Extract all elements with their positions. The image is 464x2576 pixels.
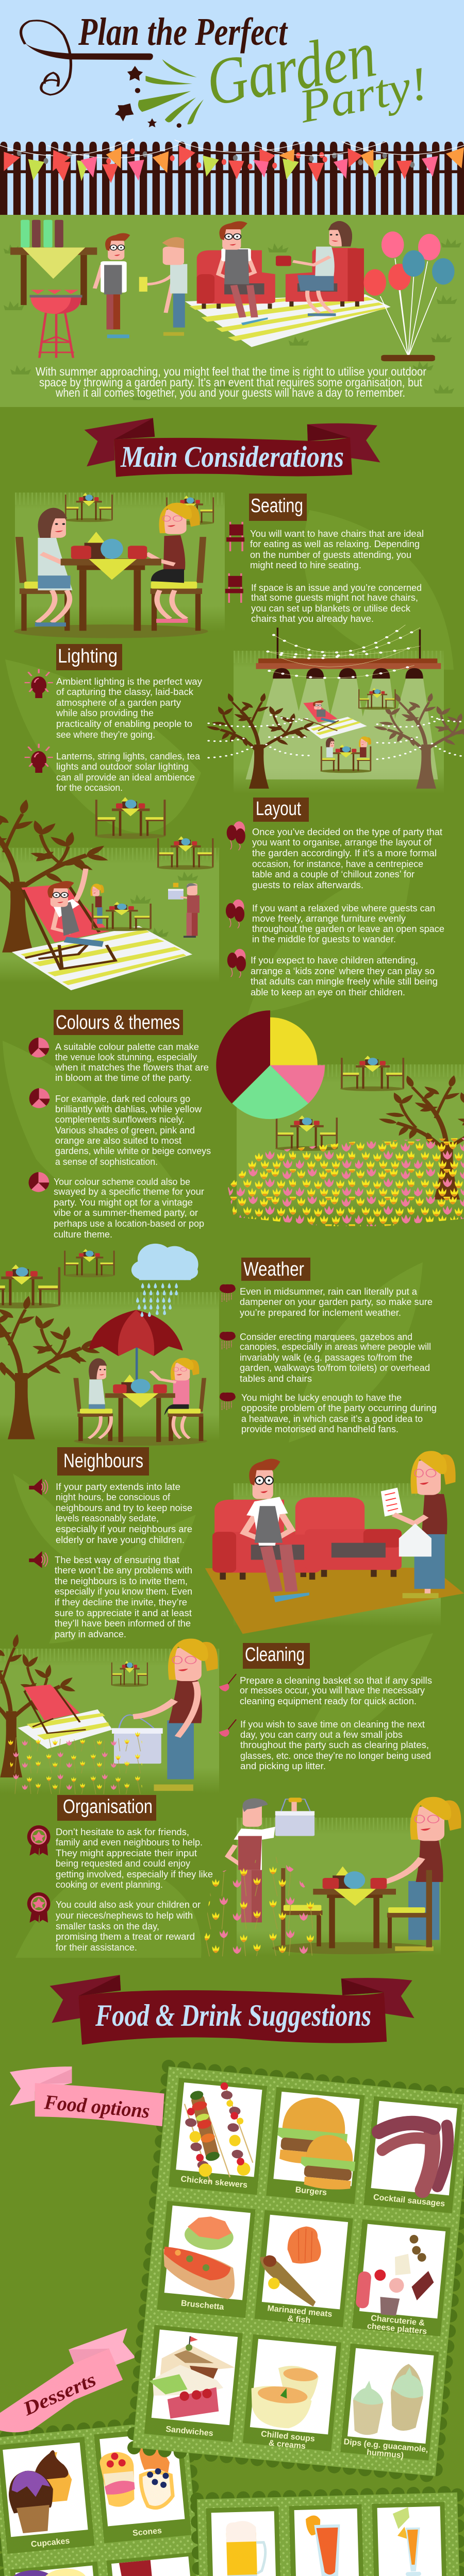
cleaning text: or messes occur, you will have the necessary xyxy=(240,1685,425,1696)
food labels xyxy=(156,2175,452,2463)
section: neighbours xyxy=(29,1447,464,1639)
layout text: able to keep an eye on their children. xyxy=(251,987,405,997)
lighting text: for the occasion. xyxy=(56,783,123,793)
organisation text: promising them a treat or reward xyxy=(56,1931,195,1942)
seating illustration xyxy=(14,493,225,638)
colours text: For example, dark red colours go xyxy=(55,1094,190,1104)
neighbours illustration xyxy=(205,1451,464,1634)
food labels: & fish xyxy=(287,2314,311,2325)
lemonade xyxy=(393,2507,421,2576)
cleaning heading: Cleaning xyxy=(245,1644,305,1666)
woman with invite xyxy=(381,1451,456,1598)
weather text: Even in midsummer, rain can literally put a xyxy=(240,1286,418,1297)
beer xyxy=(226,2520,266,2576)
card backings xyxy=(205,2502,450,2576)
colours text: brilliantly with dahlias, while yellow xyxy=(55,1104,202,1114)
weather text: you’re prepared for inclement weather. xyxy=(240,1308,401,1318)
lighting text: Lanterns, string lights, candles, tea xyxy=(56,751,201,761)
layout text: that adults can mingle freely while still being xyxy=(251,976,438,987)
panel: hero garden illustration xyxy=(0,215,464,407)
dips xyxy=(350,2359,426,2440)
cleaning text: Prepare a cleaning basket so that if any spills xyxy=(240,1675,432,1686)
weather text: opposite problem of the party occurring during xyxy=(241,1403,437,1413)
section: seating xyxy=(14,493,424,638)
layout text: move freely, arrange furniture evenly xyxy=(252,913,406,924)
board xyxy=(132,2066,464,2476)
weather illustration xyxy=(0,1244,219,1446)
board: desserts xyxy=(0,2419,209,2576)
rug xyxy=(12,926,192,990)
icons: chairs xyxy=(225,522,244,603)
colours text: swayed by a specific theme for your xyxy=(54,1187,204,1197)
picnic rug xyxy=(185,293,391,347)
lighting text xyxy=(56,676,202,793)
sky xyxy=(0,0,464,215)
icons: rosettes xyxy=(27,1825,51,1923)
organisation text: your nieces/nephews to help with xyxy=(56,1910,193,1921)
cleaning illustration xyxy=(0,1634,219,1794)
organisation heading xyxy=(57,1795,156,1821)
lawn xyxy=(0,215,464,407)
neighbours text: the neighbours is to invite them, xyxy=(55,1576,188,1586)
section: layout xyxy=(0,797,444,997)
cleaning text: day, you can carry out a few small jobs xyxy=(240,1730,403,1740)
layout text xyxy=(251,827,444,997)
icons: light bulbs xyxy=(25,669,53,773)
card: cupcakes xyxy=(0,2437,95,2554)
neighbours text: night hours, be conscious of xyxy=(56,1492,171,1502)
seating text: that some guests might not have chairs, xyxy=(251,592,418,603)
woman left xyxy=(89,1416,111,1438)
scallop edge xyxy=(0,2419,209,2576)
small woman xyxy=(91,884,104,896)
guest one xyxy=(95,233,130,338)
pie chart xyxy=(216,1010,325,1119)
colours text: the venue look stunning, especially xyxy=(55,1052,197,1062)
man xyxy=(244,1459,309,1602)
weather text: canopies, especially in areas where people will xyxy=(240,1342,431,1352)
background leaves xyxy=(3,510,454,1958)
lighting illustration xyxy=(206,625,464,794)
iced tea xyxy=(306,2515,341,2576)
armchairs xyxy=(197,248,364,309)
layout text: arrange a ‘kids zone’ where they can play so xyxy=(251,966,435,976)
section: organisation xyxy=(27,1795,461,1956)
cleaning text xyxy=(240,1675,432,1771)
colours text: in bloom at the time of the party. xyxy=(55,1073,192,1083)
layout text: guests to relax afterwards. xyxy=(252,880,363,890)
organisation text: You could also ask your children or xyxy=(56,1900,201,1910)
neighbours text xyxy=(55,1482,192,1639)
fence xyxy=(0,142,464,215)
board: drinks xyxy=(197,2493,463,2576)
food labels: cheese platters xyxy=(367,2322,427,2336)
balloons xyxy=(363,231,455,361)
seated woman xyxy=(276,221,352,316)
icons: brooms xyxy=(219,1674,236,1737)
weather text xyxy=(240,1286,437,1434)
organisation text: smaller tasks on the day, xyxy=(56,1921,159,1931)
colours text: vibe or a summer-themed party, or xyxy=(54,1208,198,1218)
panel: hero sky, title and fence xyxy=(0,0,464,215)
scallop edge xyxy=(197,2493,463,2576)
lighting text: Ambient lighting is the perfect way xyxy=(56,676,202,687)
seating text: If space is an issue and you’re concerned xyxy=(251,583,422,593)
intro text: when it all comes together, you and your guests will have a day to remember. xyxy=(55,386,405,399)
seating text: you can set up blankets or utilise deck xyxy=(251,603,411,614)
sofa chairs xyxy=(212,1497,402,1580)
organisation text: family and even neighbours to help. xyxy=(56,1837,203,1848)
seating text: for eating as well as relaxing. Depending xyxy=(250,539,420,549)
cleaning text: cleaning equipment ready for quick action. xyxy=(240,1696,417,1706)
layout heading: Layout xyxy=(256,798,301,820)
chicken skewers xyxy=(177,2079,260,2187)
organisation text: Don’t hesitate to ask for friends, xyxy=(56,1827,189,1837)
neighbours text: If your party extends into late xyxy=(56,1482,180,1492)
colours text xyxy=(54,1042,211,1240)
seating text: might need to hire seating. xyxy=(250,560,361,570)
woman with table xyxy=(281,1797,461,1951)
neighbours heading xyxy=(57,1447,149,1476)
seating text: You will want to have chairs that are ideal xyxy=(250,529,424,539)
sandwiches xyxy=(146,2333,237,2424)
chairs xyxy=(73,1378,206,1412)
card whites xyxy=(152,2082,457,2444)
card: cupcakes: Cupcakes xyxy=(30,2537,70,2549)
card backings xyxy=(144,2078,462,2461)
food labels: Marinated meats xyxy=(267,2304,333,2319)
neighbours text: neighbours and try to keep noise xyxy=(56,1503,192,1513)
colours text: Various shades of green, pink and xyxy=(55,1125,195,1136)
deck chair xyxy=(21,884,109,942)
layout text: occasion, for instance, have a centrepiece xyxy=(252,859,423,869)
weather text: Consider erecting marquees, gazebos and xyxy=(240,1332,412,1342)
lighting text: practicality of enabling people to xyxy=(56,719,192,729)
drinks table xyxy=(10,220,97,305)
neighbours text: party in advance. xyxy=(55,1629,126,1639)
intro text: space by throwing a garden party. It’s an event that requires some organisation, but xyxy=(39,376,423,389)
title flourish xyxy=(21,21,204,128)
bunting xyxy=(0,139,464,183)
main table xyxy=(79,570,87,631)
layout text: the garden accordingly. If it’s a more formal xyxy=(252,848,437,858)
seating text: chairs that you already have. xyxy=(251,614,374,624)
card: jelly shots xyxy=(106,2552,204,2576)
weather text: garden, walkways to/from toilets) or overhead xyxy=(240,1363,430,1373)
neighbours text: elderly or have young children. xyxy=(56,1535,185,1545)
seating text: on the number of guests attending, you xyxy=(250,550,411,560)
layout text: you want to organise, arrange the layout of xyxy=(252,837,432,848)
woman xyxy=(167,1720,182,1780)
bruschetta xyxy=(159,2212,241,2300)
food labels: Sandwiches xyxy=(165,2425,213,2438)
lighting text: while also providing the xyxy=(56,708,154,718)
basket xyxy=(119,1715,157,1731)
lighting text: lights and outdoor solar lighting xyxy=(56,761,189,772)
heading ribbon: main considerations: Main Considerations xyxy=(120,440,344,473)
organisation text xyxy=(56,1827,213,1953)
rug and deck chair xyxy=(18,1709,112,1749)
icons: balloons xyxy=(226,821,246,978)
scallop edge xyxy=(132,2066,464,2476)
icons: speakers xyxy=(29,1479,47,1568)
colours illustration xyxy=(216,1010,464,1226)
icons: mini pies xyxy=(29,1038,49,1192)
neighbours text: there won’t be any problems with xyxy=(55,1565,192,1575)
marinated meats and fish xyxy=(256,2223,323,2307)
weather heading: Weather xyxy=(243,1259,304,1280)
organisation heading: Organisation xyxy=(63,1796,153,1818)
organisation text: They might appreciate their input xyxy=(56,1848,197,1858)
lighting text: can all provide an ideal ambience xyxy=(56,772,195,783)
neighbours text: levels reasonably sedate, xyxy=(56,1513,159,1523)
right woman xyxy=(157,590,187,619)
man with basket xyxy=(168,890,184,900)
neighbours text: especially if your neighbours are xyxy=(56,1524,192,1534)
ribbon: food options xyxy=(10,2066,164,2126)
ribbon: food options: Food options xyxy=(43,2090,151,2123)
weather text: invariably walk (e.g. passages to/from the xyxy=(240,1352,412,1363)
weather text: dampener on your garden party, so make sure xyxy=(240,1297,433,1307)
board xyxy=(0,2419,209,2576)
seating heading xyxy=(249,494,307,521)
flower bed xyxy=(6,1730,142,1794)
weather text: a heatwave, in which case it’s a good idea to xyxy=(241,1414,423,1424)
ribbon: desserts xyxy=(0,2328,136,2432)
layout text: table and a couple of ‘chillout zones’ for xyxy=(252,869,415,879)
section: cleaning xyxy=(0,1634,432,1794)
seating heading: Seating xyxy=(251,495,303,517)
cleaning text: throughout the party such as clearing plates, xyxy=(240,1740,429,1750)
colours text: party. You might opt for a vintage xyxy=(54,1197,193,1208)
colours text: perhaps use a location-based or pop xyxy=(54,1218,204,1229)
weather text: You might be lucky enough to have the xyxy=(241,1393,402,1403)
card: scones xyxy=(94,2426,191,2543)
neighbours text: they’ll have been informed of the xyxy=(55,1618,191,1629)
section: colours and themes xyxy=(29,1010,464,1240)
chilled soups xyxy=(248,2362,319,2431)
layout text: Once you’ve decided on the type of party that xyxy=(252,827,442,837)
food labels: Chilled soups xyxy=(260,2430,316,2444)
food labels: Bruschetta xyxy=(180,2299,224,2312)
intro text xyxy=(36,365,426,399)
barbecue xyxy=(29,290,82,358)
ribbon: desserts: Desserts xyxy=(20,2369,100,2420)
colours text: complements sunflowers nicely. xyxy=(55,1114,185,1125)
seating text xyxy=(250,529,424,624)
flower bush xyxy=(204,1854,321,1956)
lighting text: atmosphere of a garden party xyxy=(56,698,181,708)
organisation text: cooking or event planning. xyxy=(56,1879,163,1890)
section: weather xyxy=(0,1244,437,1446)
rain cloud xyxy=(131,1244,198,1310)
colours text: orange are also suited to most xyxy=(55,1136,181,1146)
card whites xyxy=(211,2506,444,2576)
weather text: tables and chairs xyxy=(240,1374,312,1384)
section: lighting xyxy=(25,625,464,794)
organisation text: for their assistance. xyxy=(56,1942,137,1953)
board xyxy=(197,2493,463,2576)
neighbours text: especially if you know them. Even xyxy=(55,1586,192,1597)
flower bed xyxy=(228,1138,464,1226)
lighting text: of capturing the classy, laid-back xyxy=(56,687,194,697)
layout text: in the middle for guests to wander. xyxy=(252,934,396,944)
title: garden: Garden xyxy=(201,17,382,120)
cleaning text: If you wish to save time on cleaning the next xyxy=(240,1719,425,1730)
table xyxy=(119,1398,123,1442)
cleaning text: glasses, etc. once they’re no longer being used xyxy=(240,1751,431,1761)
card: scones: Scones xyxy=(132,2527,162,2538)
colours text: when it matches the flowers that are xyxy=(55,1062,209,1073)
colours text: culture theme. xyxy=(54,1229,112,1240)
man with basket xyxy=(228,1798,314,1922)
food labels: hummus) xyxy=(366,2448,404,2460)
title: party: Party! xyxy=(294,57,432,133)
organisation illustration xyxy=(204,1797,461,1956)
board: food options xyxy=(132,2066,464,2476)
organisation text: getting involved, especially if they like xyxy=(56,1869,213,1879)
umbrella xyxy=(89,1310,183,1381)
weather text: provide motorised and handheld fans. xyxy=(241,1424,399,1434)
colours text: A suitable colour palette can make xyxy=(55,1042,199,1052)
heading ribbon: food and drink: Food & Drink Suggestions xyxy=(95,1998,371,2032)
layout text: If you expect to have children attending, xyxy=(251,955,418,965)
left woman xyxy=(37,590,70,622)
garden scene xyxy=(4,220,461,400)
food labels: Charcuterie & xyxy=(371,2314,425,2328)
organisation text: being requested and could enjoy xyxy=(56,1858,190,1869)
burgers xyxy=(273,2094,361,2192)
cocktail sausages xyxy=(374,2119,450,2192)
colours text: gardens, while white or beige conveys xyxy=(55,1146,211,1156)
woman right xyxy=(173,1416,189,1438)
heading ribbon: food and drink xyxy=(49,1975,415,2045)
neighbours text: if they decline the invite, they’re xyxy=(55,1597,187,1607)
food labels: & creams xyxy=(268,2439,306,2451)
heading ribbon: main considerations xyxy=(85,418,380,477)
colours heading: Colours & themes xyxy=(56,1012,180,1033)
guest two xyxy=(139,237,187,336)
neighbours text: sure to appreciate it and at least xyxy=(55,1608,192,1618)
layout text: throughout the garden or leave an open space xyxy=(252,924,444,934)
food labels: Cocktail sausages xyxy=(373,2193,445,2209)
lighting text: see where they’re going. xyxy=(56,730,155,740)
cleaning text: and picking up litter. xyxy=(240,1761,326,1771)
food labels: Burgers xyxy=(295,2185,327,2197)
food labels: Dips (e.g. guacamole, xyxy=(343,2437,428,2454)
charcuterie xyxy=(355,2230,438,2319)
layout illustration xyxy=(0,797,219,990)
neighbours heading: Neighbours xyxy=(63,1450,143,1472)
title: plan the perfect: Plan the Perfect xyxy=(78,10,288,54)
seated man xyxy=(219,221,268,325)
icons: rain clouds xyxy=(220,1284,236,1410)
card: fruit tarts xyxy=(4,2562,108,2576)
colours text: Your colour scheme could also be xyxy=(54,1177,190,1187)
food labels: Chicken skewers xyxy=(180,2175,248,2190)
colours text: a sense of sophistication. xyxy=(55,1157,158,1167)
layout text: If you want a relaxed vibe where guests can xyxy=(252,903,435,913)
neighbours text: The best way of ensuring that xyxy=(55,1555,179,1565)
chairs xyxy=(15,537,206,583)
lighting heading: Lighting xyxy=(58,646,118,667)
man xyxy=(63,937,104,947)
